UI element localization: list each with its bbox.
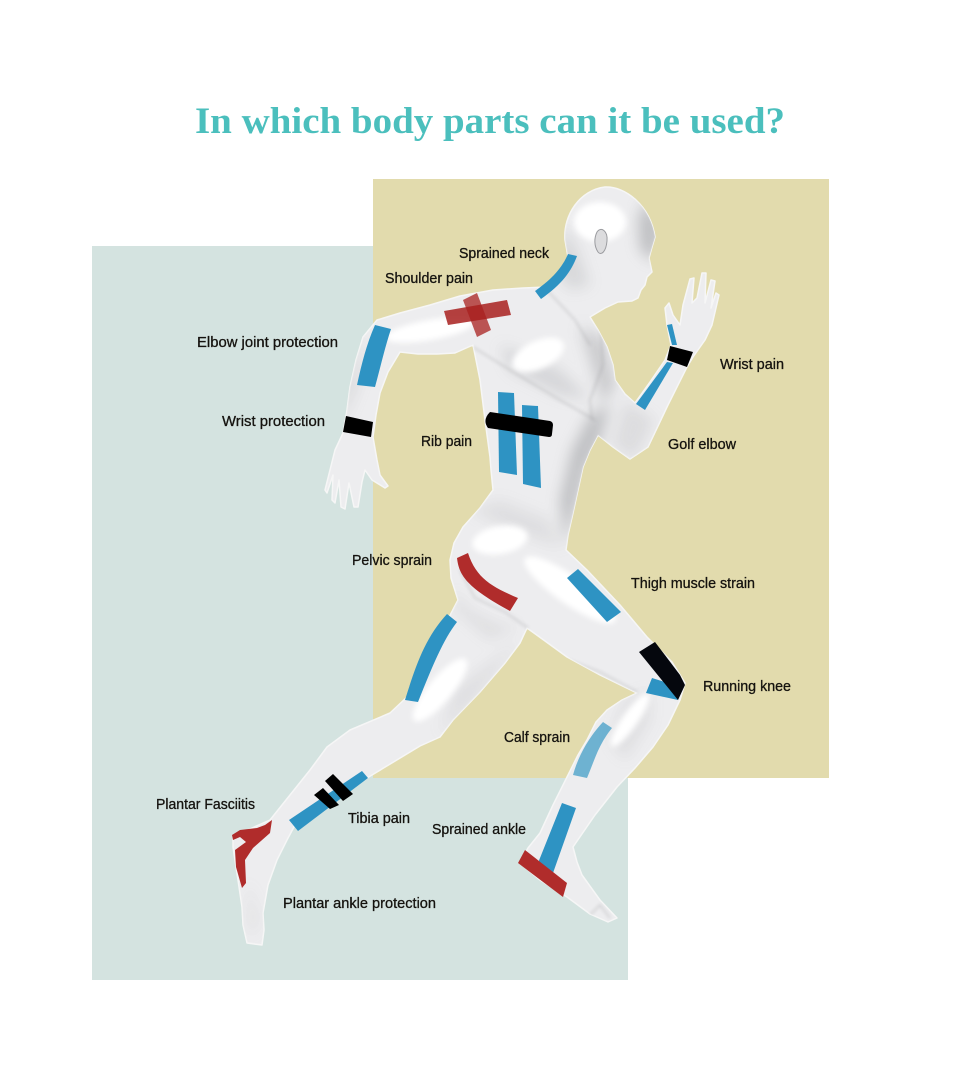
tape: plantar fasciitis	[232, 820, 272, 888]
tape: sprained ankle	[538, 803, 576, 873]
panel: teal background block	[92, 246, 628, 980]
tape: shoulder cross	[444, 293, 511, 337]
label: Running knee: Running knee	[703, 679, 791, 695]
tape: right wrist band	[667, 346, 693, 367]
tape: sprained neck	[535, 254, 577, 299]
label: Sprained neck: Sprained neck	[459, 246, 550, 262]
label: Plantar ankle protection: Plantar ankle protection	[283, 896, 436, 912]
label: Shoulder pain: Shoulder pain	[385, 271, 473, 287]
tape: knee blue	[646, 678, 678, 700]
tape: elbow joint	[357, 325, 391, 387]
runner figure	[233, 187, 719, 945]
tape: palm strip	[667, 324, 677, 345]
label: Calf sprain: Calf sprain	[504, 730, 570, 746]
icon: ear	[595, 229, 607, 254]
tape: pelvic sprain	[457, 553, 518, 611]
label: Wrist pain: Wrist pain	[720, 357, 784, 373]
tape: rib band	[485, 412, 553, 437]
tape: tibia	[289, 771, 368, 831]
tape: rear thigh	[405, 614, 457, 702]
title: In which body parts can it be used?	[195, 101, 785, 142]
label: Wrist protection: Wrist protection	[222, 414, 325, 430]
label: Plantar Fasciitis: Plantar Fasciitis	[156, 797, 255, 813]
tape: tibia bands	[314, 774, 353, 809]
label: Rib pain: Rib pain	[421, 434, 472, 450]
label: Pelvic sprain: Pelvic sprain	[352, 553, 432, 569]
tape: plantar ankle	[518, 850, 567, 897]
label: Elbow joint protection: Elbow joint protection	[197, 335, 338, 351]
tape: left wrist band	[343, 416, 373, 437]
tape: thigh muscle	[567, 569, 621, 622]
label: Sprained ankle: Sprained ankle	[432, 822, 526, 838]
tape: running knee band	[639, 642, 685, 700]
label: Tibia pain: Tibia pain	[348, 811, 410, 827]
tape: calf sprain	[573, 722, 612, 778]
tape: rib strips	[498, 392, 541, 488]
label: Thigh muscle strain: Thigh muscle strain	[631, 576, 755, 592]
panel: tan background block	[373, 179, 829, 778]
tape: golf elbow forearm	[636, 362, 673, 410]
label: Golf elbow: Golf elbow	[668, 437, 737, 453]
